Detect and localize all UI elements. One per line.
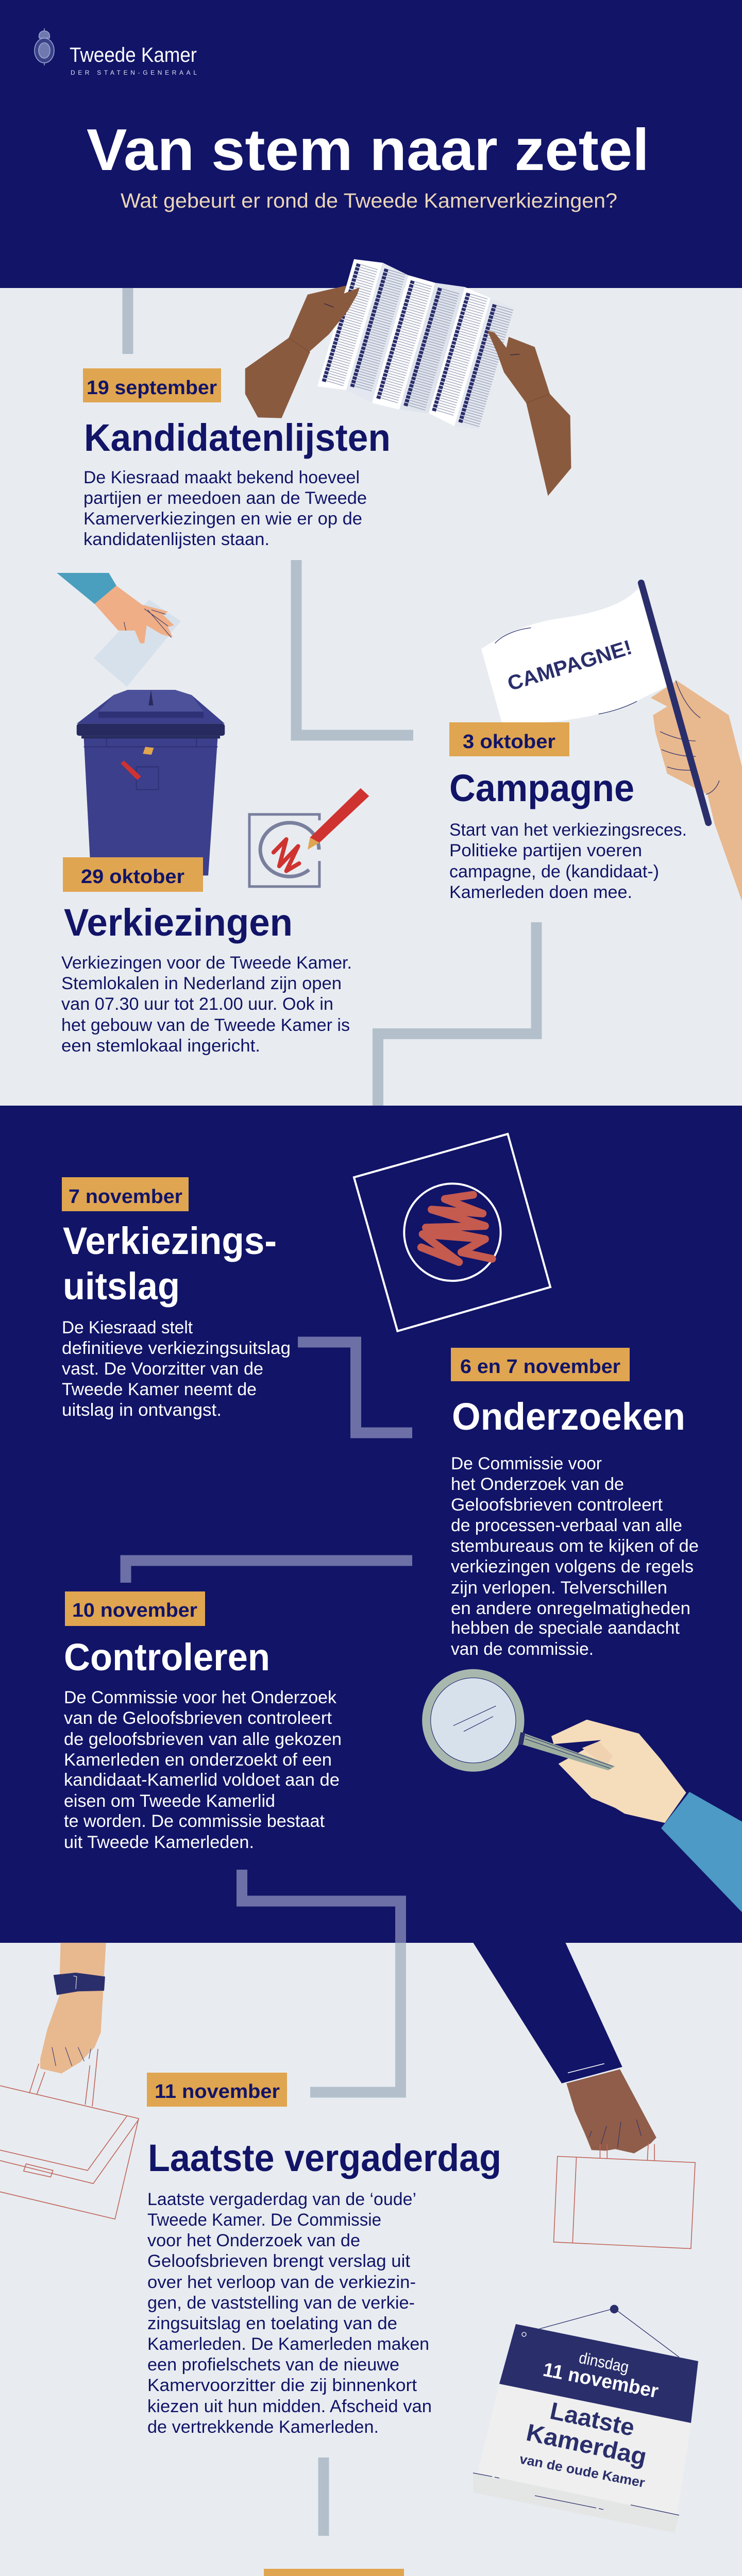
heading xyxy=(63,1219,277,1308)
icon: crest xyxy=(35,28,54,65)
ballot box xyxy=(77,690,225,875)
left bag xyxy=(0,2049,139,2219)
candidate list paper xyxy=(317,259,514,429)
heading: Controleren xyxy=(64,1636,270,1679)
text block: Tweede Kamer. De Commissie xyxy=(147,2210,381,2230)
date badge xyxy=(62,1177,189,1211)
panel: Controleren xyxy=(64,1591,342,1852)
text block: uitslag in ontvangst. xyxy=(62,1400,222,1420)
date badge xyxy=(65,1591,205,1626)
text block: kandidaat-Kamerlid voldoet aan de xyxy=(64,1770,340,1790)
text block: stembureaus om te kijken of de xyxy=(451,1536,699,1556)
logo: Tweede Kamer xyxy=(35,28,197,76)
text block: een profielschets van de nieuwe xyxy=(147,2355,399,2375)
text block xyxy=(147,2190,432,2437)
calendar title line two: Kamerdag xyxy=(524,2418,649,2470)
text block: vast. De Voorzitter van de xyxy=(62,1359,263,1379)
text block: Verkiezingen voor de Tweede Kamer. xyxy=(61,953,352,973)
heading: Verkiezingen xyxy=(64,901,293,944)
text block: Laatste vergaderdag van de ‘oude’ xyxy=(147,2190,416,2209)
left hand with watch xyxy=(40,1943,106,2074)
text block: De Commissie voor het Onderzoek xyxy=(64,1688,337,1707)
text block: de processen-verbaal van alle xyxy=(451,1516,682,1535)
text block xyxy=(83,468,367,549)
calendar header xyxy=(499,2324,698,2423)
illustration: campaign flag xyxy=(481,583,742,902)
date badge: 7 november xyxy=(69,1186,182,1208)
date badge: 11 november xyxy=(155,2081,280,2103)
text block: eisen om Tweede Kamerlid xyxy=(64,1791,275,1811)
text block: de vertrekkende Kamerleden. xyxy=(147,2417,379,2437)
text block: Politieke partijen voeren xyxy=(449,841,642,860)
ballot paper xyxy=(94,600,181,687)
date badge xyxy=(451,1348,630,1381)
flag text: CAMPAGNE! xyxy=(505,636,635,696)
flag xyxy=(481,587,672,723)
panel: Campagne xyxy=(449,722,687,902)
text block xyxy=(61,953,352,1056)
text block: het Onderzoek van de xyxy=(451,1475,624,1494)
heading: Kandidatenlijsten xyxy=(84,416,391,459)
sleeve xyxy=(661,1792,742,1912)
illustration: hanging calendar xyxy=(473,2324,698,2533)
text block: Geloofsbrieven controleert xyxy=(451,1495,663,1515)
panel: Laatste vergaderdag xyxy=(147,2073,501,2437)
text block: definitieve verkiezingsuitslag xyxy=(62,1338,291,1358)
text block: Geloofsbrieven brengt verslag uit xyxy=(147,2251,411,2271)
text block: van de Geloofsbrieven controleert xyxy=(64,1708,332,1728)
right bag xyxy=(553,2143,695,2249)
panel: Verkiezingsuitslag xyxy=(62,1177,291,1420)
text block: De Kiesraad maakt bekend hoeveel xyxy=(83,468,360,487)
text block: en andere onregelmatigheden xyxy=(451,1599,690,1618)
title: Van stem naar zetel xyxy=(87,117,649,183)
panel: Kandidatenlijsten xyxy=(83,368,391,549)
red scribble xyxy=(421,1195,492,1262)
text block: Kamerleden. De Kamerleden maken xyxy=(147,2334,429,2354)
calendar page xyxy=(473,2384,691,2533)
text block: Kamerleden en onderzoekt of een xyxy=(64,1750,332,1770)
calendar hanger xyxy=(539,2305,679,2357)
icon: stamp with red pencil xyxy=(249,788,369,887)
calendar title line one: Laatste xyxy=(548,2397,637,2441)
text block: de geloofsbrieven van alle gekozen xyxy=(64,1730,342,1749)
logo subtitle: DER STATEN-GENERAAL xyxy=(71,69,197,76)
calendar subtitle: van de oude Kamer xyxy=(518,2451,646,2490)
date badge xyxy=(63,857,203,892)
magnifier xyxy=(422,1669,615,1772)
date badge: 29 oktober xyxy=(81,866,184,888)
text block xyxy=(451,1454,699,1659)
text block: Stemlokalen in Nederland zijn open xyxy=(61,974,342,993)
text block: uit Tweede Kamerleden. xyxy=(64,1833,254,1852)
text block: hebben de speciale aandacht xyxy=(451,1618,680,1638)
heading: uitslag xyxy=(63,1265,180,1308)
date badge: 19 september xyxy=(87,377,217,399)
date badge: 10 november xyxy=(72,1600,197,1621)
illustration: ballot box, hand and stamp xyxy=(57,573,369,887)
text block: campagne, de (kandidaat-) xyxy=(449,862,659,882)
illustration: magnifying glass in hand xyxy=(422,1669,742,1912)
panel: Onderzoeken xyxy=(451,1348,699,1659)
illustration: candidate list held by hands xyxy=(245,259,571,496)
text block: van de commissie. xyxy=(451,1639,594,1659)
text block: het gebouw van de Tweede Kamer is xyxy=(61,1015,350,1035)
text block: Kamerleden doen mee. xyxy=(449,883,632,902)
right arm and hand xyxy=(473,1943,656,2154)
ballot circle xyxy=(404,1183,501,1281)
text block: verkiezingen volgens de regels xyxy=(451,1557,694,1577)
panel: Eerste vergaderdag xyxy=(264,2569,668,2576)
text block: De Commissie voor xyxy=(451,1454,602,1473)
date badge: 3 oktober xyxy=(463,731,555,753)
flag pole xyxy=(641,583,709,823)
text block: Start van het verkiezingsreces. xyxy=(449,820,687,840)
date badge xyxy=(264,2569,404,2576)
panel: Verkiezingen xyxy=(61,857,352,1056)
heading: Onderzoeken xyxy=(452,1395,685,1438)
text block: De Kiesraad stelt xyxy=(62,1318,193,1337)
text block: partijen er meedoen aan de Tweede xyxy=(83,488,367,508)
text block xyxy=(449,820,687,902)
text block: zingsuitslag en toelating van de xyxy=(147,2314,397,2333)
text block: Kamerverkiezingen en wie er op de xyxy=(83,509,362,529)
fingers xyxy=(660,681,719,794)
heading: Campagne xyxy=(449,767,634,809)
logo wordmark: Tweede Kamer xyxy=(70,44,197,66)
text block: kiezen uit hun midden. Afscheid van xyxy=(147,2397,432,2416)
text block: Tweede Kamer neemt de xyxy=(62,1380,257,1399)
hand behind pole xyxy=(651,681,742,902)
text block: over het verloop van de verkiezin- xyxy=(147,2273,416,2292)
text block xyxy=(64,1688,342,1852)
text block: voor het Onderzoek van de xyxy=(147,2231,360,2250)
hand xyxy=(551,1720,686,1823)
ballot frame xyxy=(354,1134,550,1331)
date badge: 6 en 7 november xyxy=(460,1356,620,1378)
heading: Laatste vergaderdag xyxy=(148,2137,501,2179)
date badge xyxy=(449,722,569,756)
illustration: hands carrying bags xyxy=(0,1943,695,2357)
text block: zijn verlopen. Telverschillen xyxy=(451,1578,667,1598)
text block xyxy=(62,1318,291,1420)
date badge xyxy=(83,368,221,402)
subtitle: Wat gebeurt er rond de Tweede Kamerverkiezingen? xyxy=(121,190,617,212)
date badge xyxy=(147,2073,287,2107)
calendar date: 11 november xyxy=(541,2359,660,2402)
text block: Kamervoorzitter die zij binnenkort xyxy=(147,2376,417,2395)
voter hand xyxy=(57,573,174,643)
calendar day: dinsdag xyxy=(578,2349,631,2376)
illustration: marked ballot xyxy=(354,1134,550,1331)
text block: kandidatenlijsten staan. xyxy=(83,530,269,549)
heading: Verkiezings- xyxy=(63,1219,277,1262)
text block: van 07.30 uur tot 21.00 uur. Ook in xyxy=(61,994,333,1014)
text block: een stemlokaal ingericht. xyxy=(61,1036,260,1056)
left hand xyxy=(245,285,360,418)
right hand xyxy=(487,331,571,496)
calendar dashes xyxy=(473,2473,679,2515)
text block: te worden. De commissie bestaat xyxy=(64,1811,325,1831)
text block: gen, de vaststelling van de verkie- xyxy=(147,2293,415,2313)
